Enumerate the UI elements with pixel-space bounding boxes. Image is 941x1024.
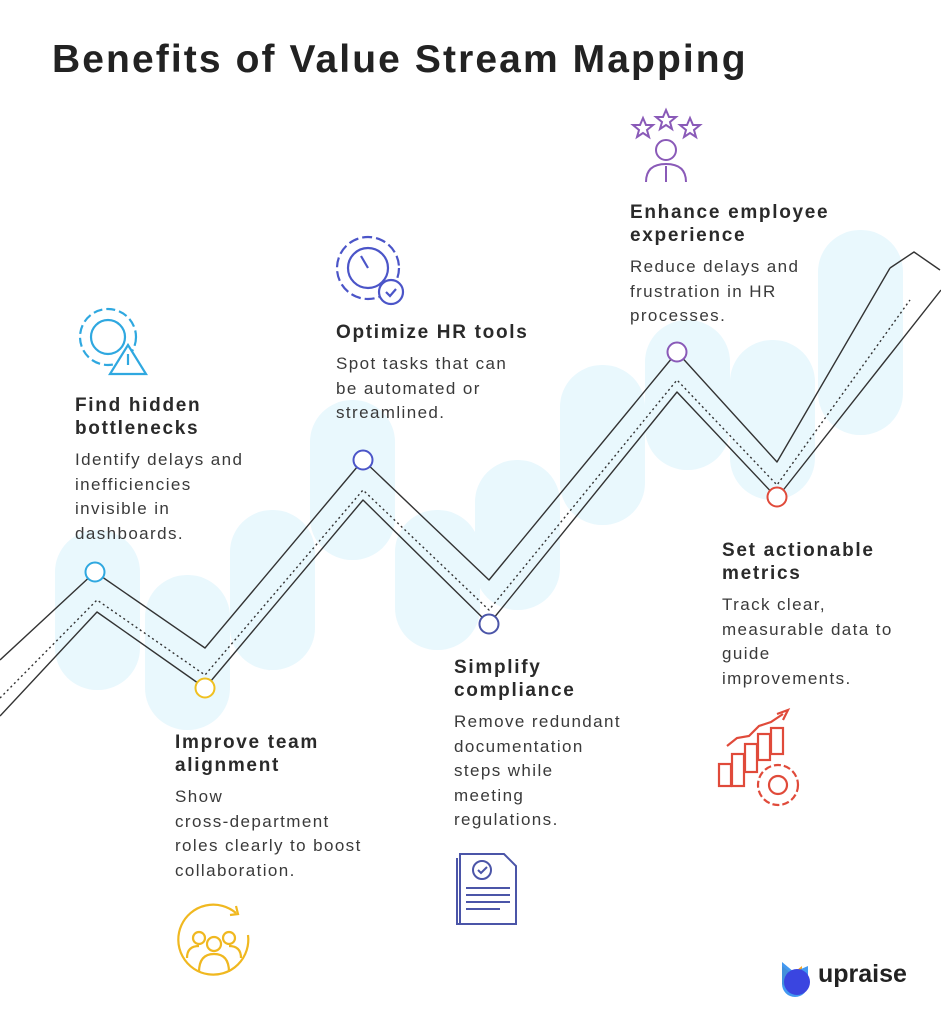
text: find hidden bottlenecks: dashboards. — [75, 524, 184, 542]
text: find hidden bottlenecks — [75, 395, 243, 542]
text: set actionable metrics: Set actionable — [722, 540, 875, 561]
path lines — [0, 252, 941, 716]
text: improve team alignment: collaboration. — [175, 860, 296, 880]
text: optimize HR tools: Spot tasks that can — [336, 354, 507, 373]
text: enhance employee experience: Reduce delays and — [630, 257, 799, 276]
text: simplify compliance: Remove redundant — [454, 712, 621, 731]
icon: document — [457, 854, 516, 924]
text: optimize HR tools: streamlined. — [336, 403, 445, 422]
icon: gear gauge — [337, 237, 403, 304]
title: Benefits of Value Stream Mapping — [52, 38, 748, 81]
text: optimize HR tools — [336, 322, 529, 422]
icon: team circle — [178, 905, 248, 975]
text: enhance employee experience: frustration in HR — [630, 282, 777, 300]
text: improve team alignment: cross-department — [175, 812, 330, 830]
logo mark — [782, 962, 810, 997]
text: improve team alignment: alignment — [175, 755, 280, 776]
text: optimize HR tools: be automated or — [336, 378, 481, 398]
text: enhance employee experience — [630, 202, 829, 325]
text: set actionable metrics: metrics — [722, 563, 802, 584]
text: set actionable metrics: improvements. — [722, 668, 852, 688]
text: simplify compliance — [454, 657, 621, 829]
icon: gear warning — [80, 309, 146, 374]
text: enhance employee experience: experience — [630, 225, 746, 246]
text: simplify compliance: Simplify — [454, 657, 542, 678]
milestone circles — [86, 342, 786, 698]
text: set actionable metrics: Track clear, — [722, 595, 826, 614]
text: enhance employee experience: Enhance employee — [630, 202, 829, 223]
text: set actionable metrics: measurable data to — [722, 620, 893, 638]
text: set actionable metrics: guide — [722, 644, 771, 663]
text: optimize HR tools: Optimize HR tools — [336, 322, 529, 343]
icon: metrics chart gear — [719, 710, 798, 805]
text: improve team alignment — [175, 732, 362, 880]
text: simplify compliance: documentation — [454, 736, 584, 756]
text: enhance employee experience: processes. — [630, 306, 726, 325]
text: find hidden bottlenecks: bottlenecks — [75, 418, 199, 439]
text: find hidden bottlenecks: Find hidden — [75, 395, 201, 416]
text: improve team alignment: Show — [175, 787, 223, 806]
text: improve team alignment: Improve team — [175, 732, 319, 753]
text: simplify compliance: meeting — [454, 786, 524, 804]
logo text: upraise — [818, 960, 907, 988]
text: simplify compliance: regulations. — [454, 810, 559, 829]
text: find hidden bottlenecks: inefficiencies — [75, 474, 192, 494]
text: set actionable metrics — [722, 540, 893, 688]
icon: employee stars — [633, 110, 700, 182]
text: simplify compliance: steps while — [454, 761, 554, 780]
text: simplify compliance: compliance — [454, 680, 576, 701]
text: find hidden bottlenecks: invisible in — [75, 499, 170, 518]
text: find hidden bottlenecks: Identify delays and — [75, 450, 243, 469]
text: improve team alignment: roles clearly to boost — [175, 836, 362, 855]
